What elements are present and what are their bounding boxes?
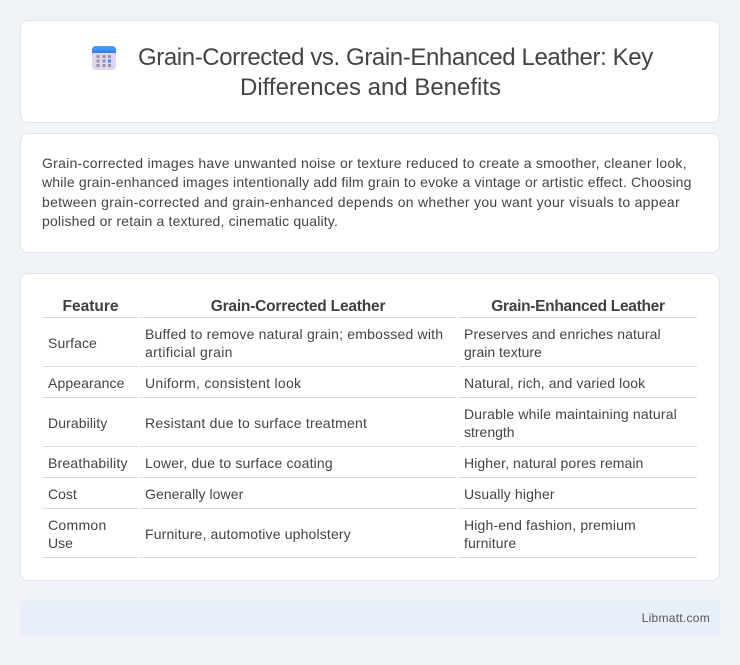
row: surface: Surface	[48, 335, 97, 351]
intro paragraph	[42, 154, 692, 229]
row: breathability: Breathability	[48, 455, 128, 471]
row: appearance: Natural, rich, and varied look	[464, 375, 645, 391]
row: durability: Durability	[48, 415, 107, 431]
row: cost: Cost	[48, 486, 77, 502]
row: appearance: Uniform, consistent look	[145, 375, 301, 391]
row: common use: Use	[48, 535, 73, 551]
row: surface: Buffed to remove natural grain; embossed with	[145, 326, 443, 342]
row: surface: grain texture	[464, 344, 542, 360]
row: surface	[48, 326, 661, 360]
table header	[62, 298, 665, 315]
row: cost	[48, 486, 555, 502]
header panel	[20, 20, 720, 123]
table header: Grain-Corrected Leather	[211, 298, 385, 315]
row: durability: Resistant due to surface treatment	[145, 415, 367, 431]
row: common use: Furniture, automotive upholstery	[145, 526, 351, 542]
title: Differences and Benefits	[240, 74, 501, 101]
title: Grain-Corrected vs. Grain-Enhanced Leather: Key	[138, 44, 653, 71]
row: breathability: Higher, natural pores remain	[464, 455, 643, 471]
row: surface: artificial grain	[145, 344, 233, 360]
row: durability: strength	[464, 424, 515, 440]
row: common use: furniture	[464, 535, 516, 551]
row: appearance: Appearance	[48, 375, 125, 391]
table panel	[20, 273, 720, 581]
row: breathability	[48, 455, 643, 471]
row: common use: Common	[48, 517, 107, 533]
table header: Grain-Enhanced Leather	[491, 298, 665, 315]
intro paragraph: polished or retain a textured, cinematic quality.	[42, 213, 338, 229]
intro paragraph: between grain-corrected and grain-enhanced depends on whether you want your visuals to appear	[42, 194, 680, 210]
table header: Feature	[62, 298, 118, 315]
intro paragraph: while grain-enhanced images intentionally add film grain to evoke a vintage or artistic effect. Choosing	[42, 174, 692, 190]
row: durability: Durable while maintaining natural	[464, 406, 677, 422]
intro text panel	[20, 133, 720, 253]
footer text: Libmatt.com	[642, 611, 710, 625]
row: surface: Preserves and enriches natural	[464, 326, 661, 342]
icon: calendar	[92, 46, 116, 70]
row: breathability: Lower, due to surface coating	[145, 455, 333, 471]
row: cost: Usually higher	[464, 486, 555, 502]
row: durability	[48, 406, 677, 440]
row: appearance	[48, 375, 646, 391]
row: common use: High-end fashion, premium	[464, 517, 636, 533]
row: cost: Generally lower	[145, 486, 243, 502]
footer bar	[20, 601, 720, 635]
comparison table	[43, 298, 697, 558]
row: common use	[48, 517, 636, 551]
intro paragraph: Grain-corrected images have unwanted noise or texture reduced to create a smoother, cleaner look,	[42, 154, 687, 170]
title	[138, 44, 654, 101]
